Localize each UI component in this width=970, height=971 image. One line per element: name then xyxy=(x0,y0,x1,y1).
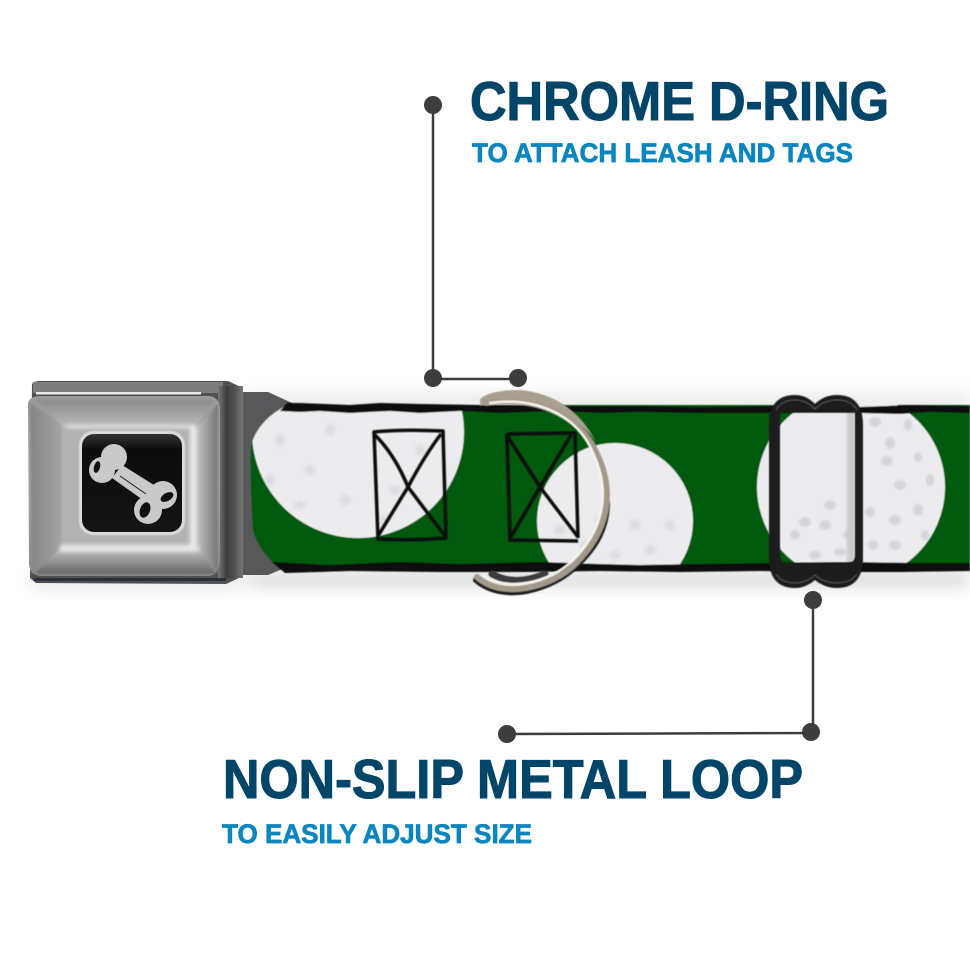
metal loop xyxy=(769,395,863,588)
subheading: non-slip metal loop: TO EASILY ADJUST SIZE xyxy=(222,819,532,849)
buckle webbing end xyxy=(240,392,300,575)
metal loop inner shadow xyxy=(847,410,855,568)
strap bottom stitched edge xyxy=(272,562,970,573)
buckle side hinge xyxy=(218,386,243,578)
collar strap xyxy=(250,402,970,574)
stitching box: right xyxy=(507,433,578,541)
buckle plate xyxy=(28,396,220,576)
stitching box: left xyxy=(374,430,446,540)
golf ball: right xyxy=(756,404,946,564)
heading: chrome d-ring: CHROME D-RING xyxy=(470,70,889,132)
heading: non-slip metal loop: NON-SLIP METAL LOOP xyxy=(223,748,803,810)
seatbelt buckle xyxy=(28,381,243,584)
infographic: collar features xyxy=(28,81,970,844)
buckle top rim xyxy=(30,381,243,584)
strap shadow xyxy=(30,396,970,586)
bone badge xyxy=(79,431,185,535)
callout: D-ring leader line xyxy=(424,96,527,387)
callout: metal loop leader line xyxy=(498,591,822,743)
golf ball: left xyxy=(252,406,465,539)
buckle highlights xyxy=(60,425,198,551)
strap top stitched edge xyxy=(280,403,970,414)
icon: bone xyxy=(89,444,177,524)
D-ring xyxy=(476,390,607,592)
golf ball: middle xyxy=(536,442,694,566)
subheading: chrome d-ring: TO ATTACH LEASH AND TAGS xyxy=(472,138,853,168)
plate bevels xyxy=(30,400,218,574)
buckle bottom rim xyxy=(34,578,226,581)
